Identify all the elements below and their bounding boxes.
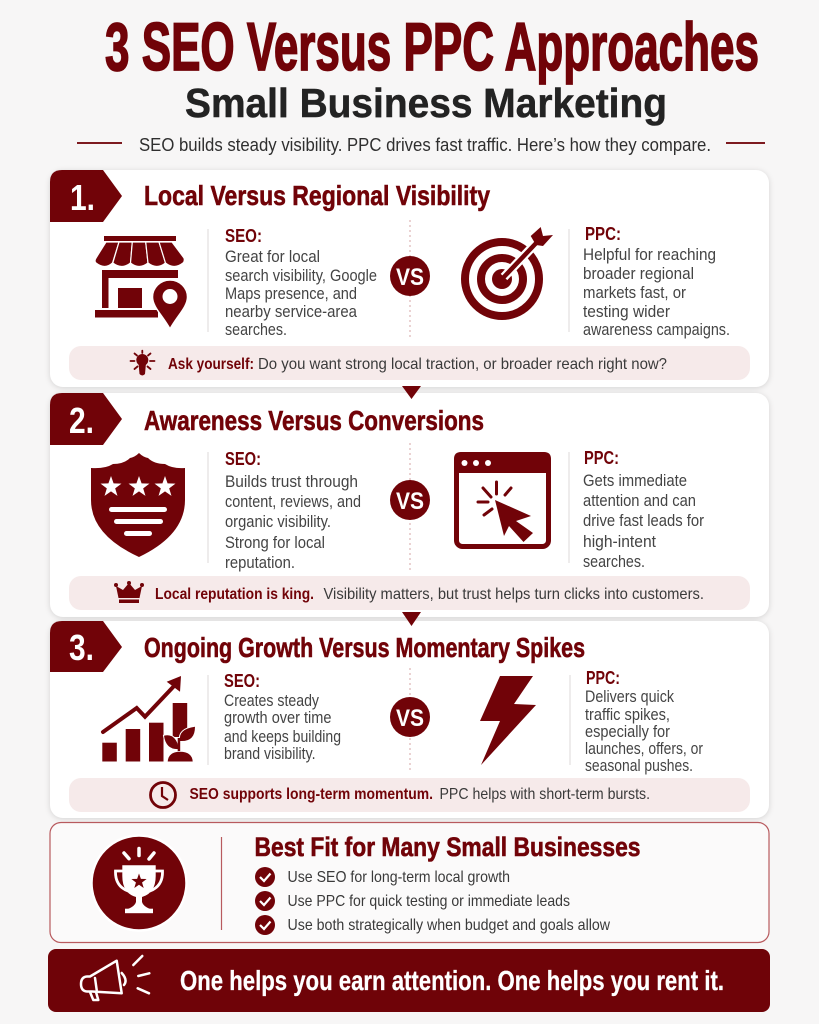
number badge 3: 3. xyxy=(69,627,94,668)
text: PPC regional: awareness campaigns. xyxy=(583,321,730,339)
text: SEO growth: and keeps building xyxy=(224,728,341,746)
heading: best fit: Best Fit for Many Small Businesses xyxy=(254,832,640,862)
text: SEO growth: growth over time xyxy=(224,709,332,727)
checklist: Use PPC for quick testing or immediate leads xyxy=(288,893,570,910)
icon: storefront with map pin xyxy=(95,236,188,329)
text: SEO local: search visibility, Google xyxy=(225,267,377,285)
text: PPC attention: attention and can xyxy=(583,492,696,510)
icon: crown xyxy=(114,581,144,603)
icon: trophy badge xyxy=(92,836,186,930)
callout: long-term momentum: PPC helps with short-term bursts. xyxy=(440,786,650,803)
tagline: SEO builds steady visibility. PPC drives fast traffic. Here’s how they compare. xyxy=(139,135,711,155)
text: PPC spikes xyxy=(585,668,703,775)
heading 1: Local Versus Regional Visibility xyxy=(144,180,490,211)
text: PPC attention: Gets immediate xyxy=(583,472,687,490)
text: SEO trust: Strong for local xyxy=(225,534,325,552)
VS badge: VS xyxy=(396,488,424,515)
panel: best fit xyxy=(50,822,769,942)
panel: awareness versus conversions xyxy=(50,393,769,617)
text: PPC attention: high-intent xyxy=(583,533,656,551)
callout: long-term momentum: SEO supports long-term momentum. xyxy=(190,786,433,803)
icon: lightning bolt xyxy=(480,676,536,765)
text: SEO trust: Builds trust through xyxy=(225,473,358,491)
text: SEO growth: SEO: xyxy=(224,671,260,691)
text: PPC spikes: Delivers quick xyxy=(585,688,675,706)
checklist xyxy=(255,867,610,935)
callout: local reputation xyxy=(69,576,750,610)
callout: local reputation: Local reputation is king. xyxy=(155,586,314,603)
text: SEO trust: reputation. xyxy=(225,554,295,572)
checklist: Use both strategically when budget and goals allow xyxy=(288,917,610,934)
panel: ongoing growth versus momentary spikes xyxy=(50,621,769,818)
text: SEO trust xyxy=(225,449,361,572)
text: PPC spikes: seasonal pushes. xyxy=(585,757,693,775)
text: PPC attention xyxy=(583,448,704,571)
banner: closing statement xyxy=(48,949,770,1012)
text: PPC spikes: traffic spikes, xyxy=(585,706,670,724)
text: PPC spikes: especially for xyxy=(585,723,670,741)
text: PPC regional: Helpful for reaching xyxy=(583,246,716,264)
text: SEO trust: SEO: xyxy=(225,449,261,469)
text: SEO local xyxy=(225,226,377,339)
panel: local versus regional visibility xyxy=(50,170,769,387)
text: PPC spikes: PPC: xyxy=(586,668,620,688)
text: PPC regional: PPC: xyxy=(585,224,621,244)
VS badge xyxy=(390,256,430,296)
icon: target with arrow xyxy=(465,227,553,316)
text: SEO local: nearby service-area xyxy=(225,303,358,321)
text: SEO local: SEO: xyxy=(225,226,262,246)
icon: clock xyxy=(150,782,176,808)
arrow: panel 2 to 3 xyxy=(402,612,421,626)
text: SEO local: Maps presence, and xyxy=(225,285,357,303)
icon: growth chart with plant xyxy=(102,676,195,762)
text: PPC regional: testing wider xyxy=(583,303,670,321)
heading 2: Awareness Versus Conversions xyxy=(144,405,484,436)
text: PPC attention: searches. xyxy=(583,553,645,571)
subtitle: Small Business Marketing xyxy=(185,80,667,126)
text: SEO local: Great for local xyxy=(225,248,320,266)
number badge 1 xyxy=(50,170,122,222)
checklist: Use SEO for long-term local growth xyxy=(288,869,510,886)
text: SEO local: searches. xyxy=(225,321,287,339)
text: SEO trust: content, reviews, and xyxy=(225,493,361,511)
text: SEO growth: brand visibility. xyxy=(224,745,316,763)
callout: local reputation: Visibility matters, but trust helps turn clicks into customers. xyxy=(324,586,704,603)
VS badge xyxy=(390,697,430,737)
heading 3: Ongoing Growth Versus Momentary Spikes xyxy=(144,632,585,663)
icon: megaphone xyxy=(81,956,149,1000)
number badge 2 xyxy=(50,393,122,445)
icon: shield with stars xyxy=(91,453,185,557)
VS badge: VS xyxy=(396,705,424,732)
VS badge xyxy=(390,480,430,520)
text: PPC spikes: launches, offers, or xyxy=(585,740,703,758)
text: SEO growth: Creates steady xyxy=(224,692,320,710)
text: SEO growth xyxy=(224,671,341,763)
text: PPC attention: drive fast leads for xyxy=(583,512,704,530)
callout: long-term momentum xyxy=(69,778,750,812)
icon: light bulb xyxy=(130,351,154,376)
callout: ask yourself xyxy=(69,346,750,380)
text: PPC regional: broader regional xyxy=(583,265,694,283)
icon: browser window with cursor xyxy=(454,452,551,546)
number badge 2: 2. xyxy=(69,400,94,441)
number badge 1: 1. xyxy=(70,177,95,218)
callout: ask yourself: Ask yourself: xyxy=(168,356,254,373)
arrow: panel 1 to 2 xyxy=(402,386,421,399)
text: PPC attention: PPC: xyxy=(584,448,619,468)
text: SEO trust: organic visibility. xyxy=(225,513,331,531)
number badge 3 xyxy=(50,621,122,672)
text: PPC regional: markets fast, or xyxy=(583,284,686,302)
text: PPC regional xyxy=(583,224,730,339)
VS badge: VS xyxy=(396,264,424,291)
callout: ask yourself: Do you want strong local traction, or broader reach right now? xyxy=(258,356,667,373)
